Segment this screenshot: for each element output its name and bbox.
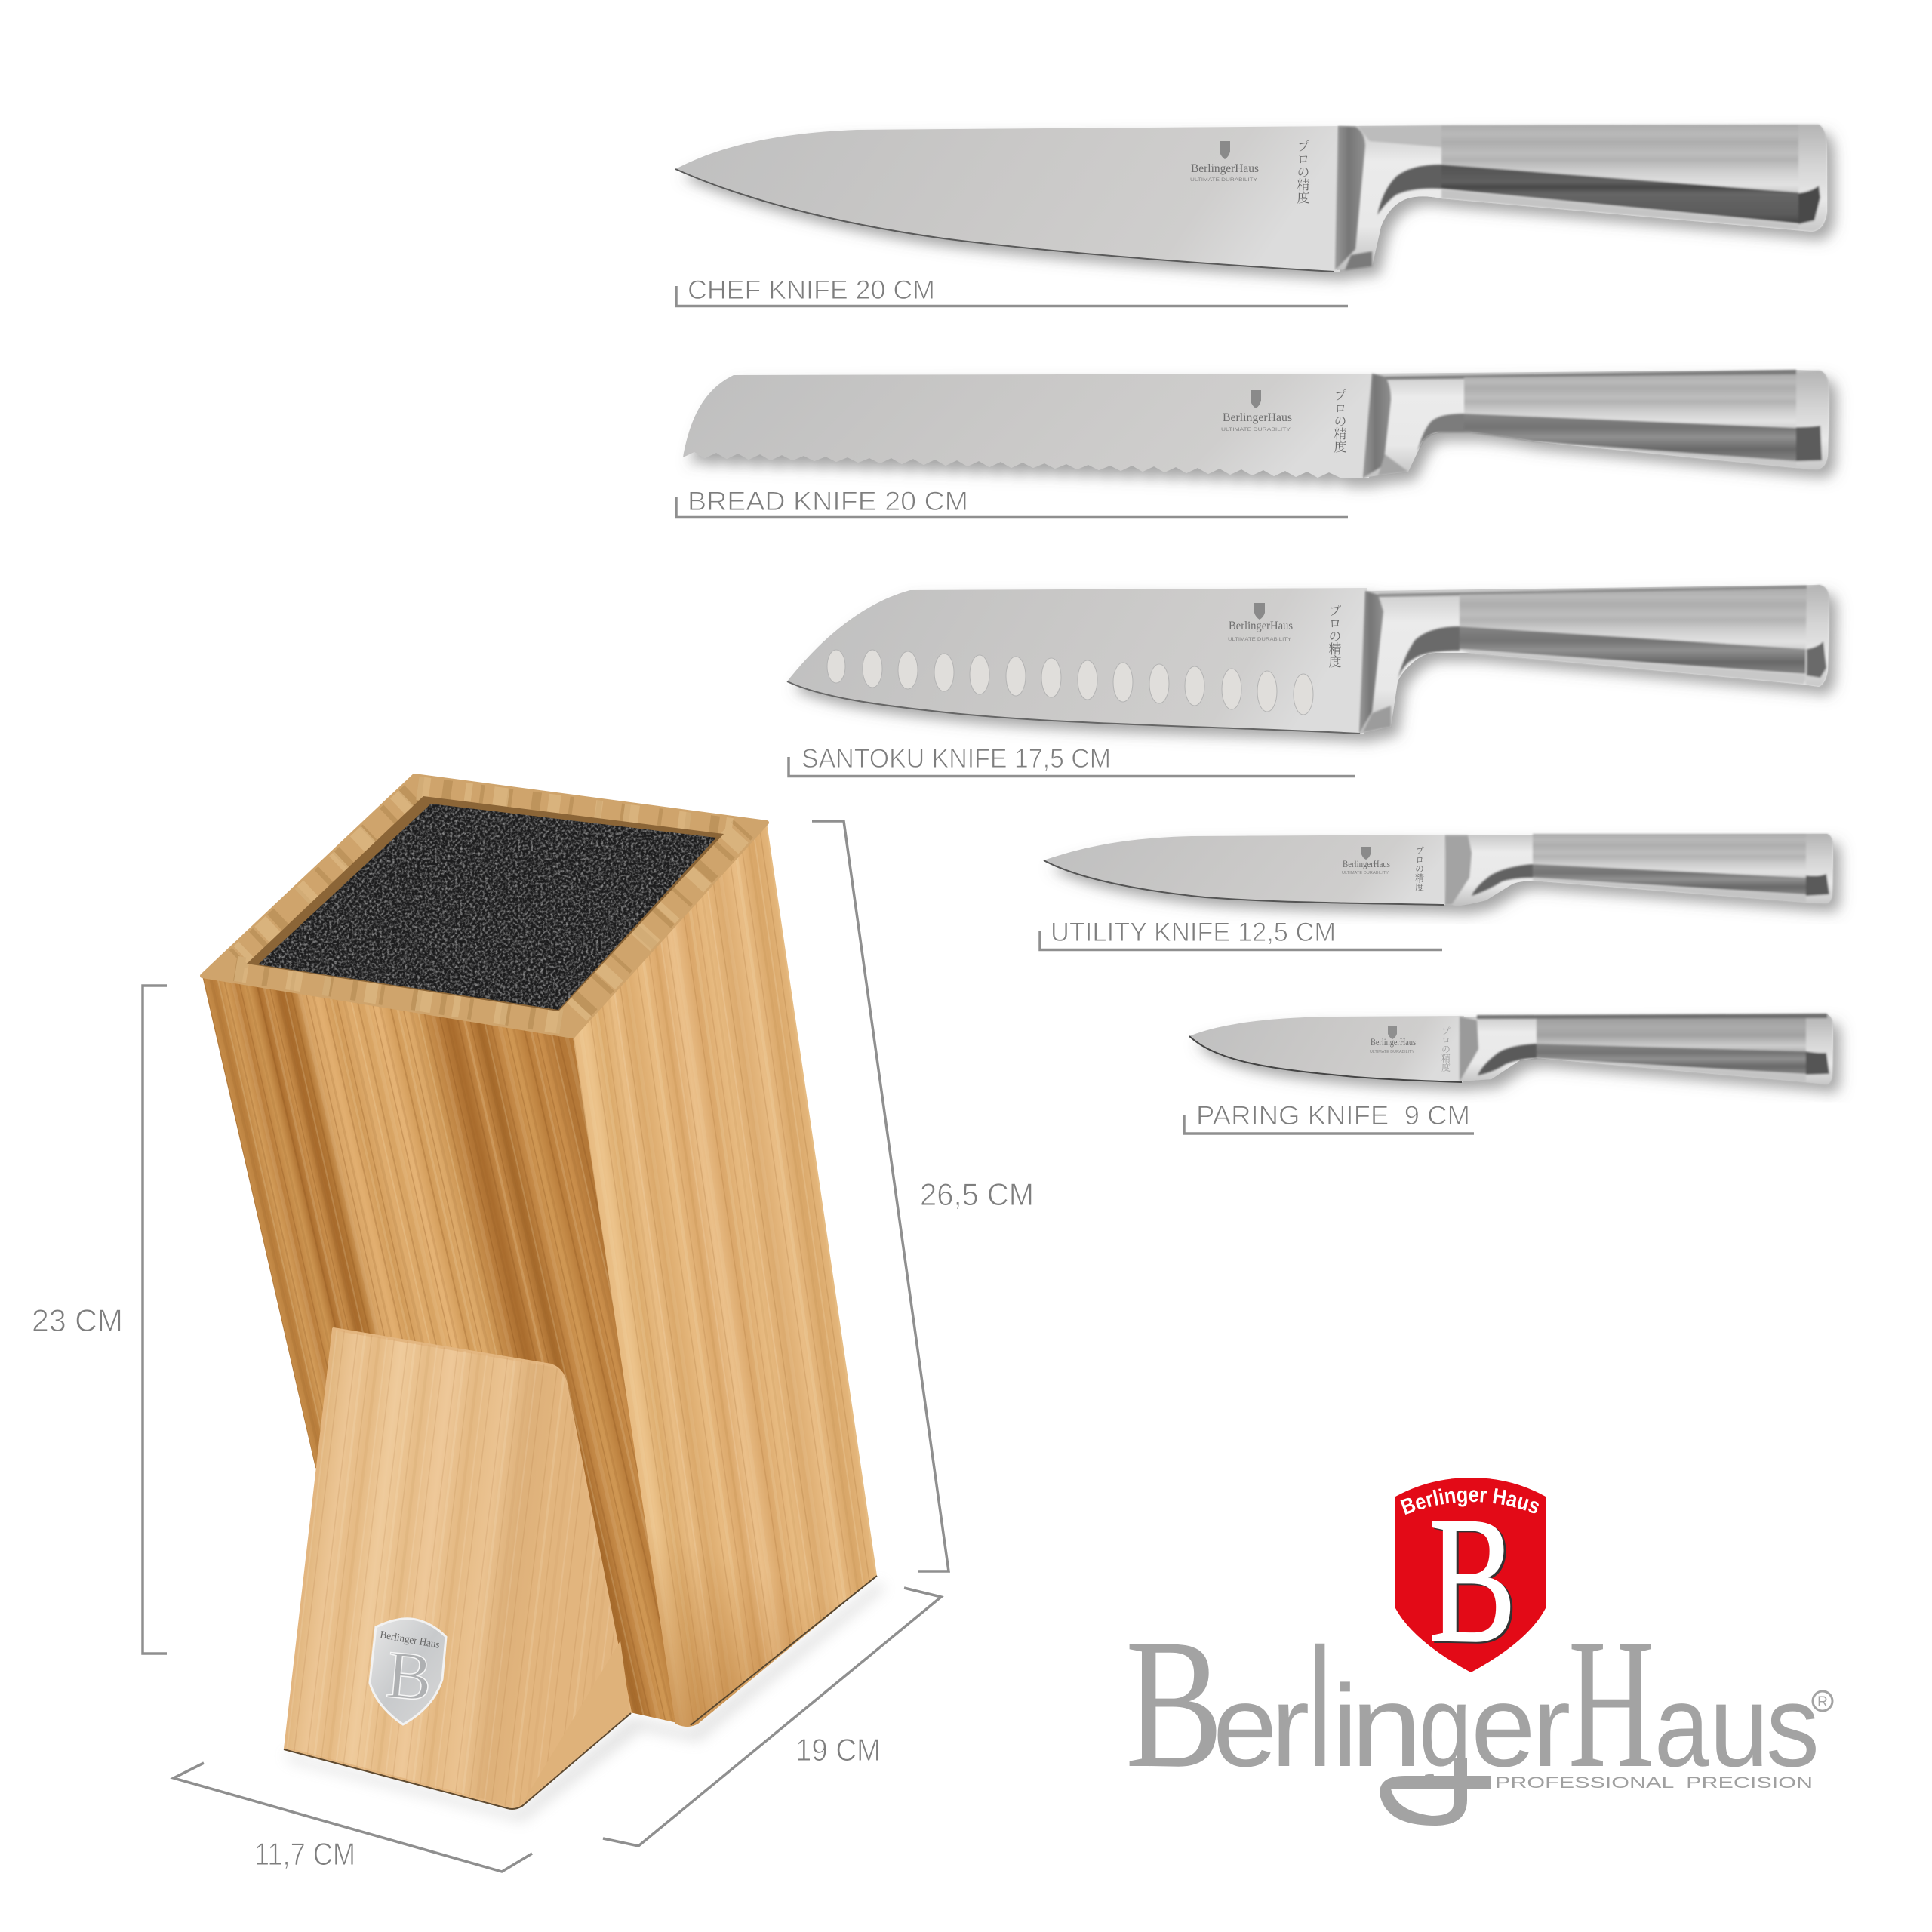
logo wordmark: r (1532, 1661, 1571, 1791)
panel: bamboo knife block (202, 776, 884, 1822)
santoku blade markings: ULTIMATE DURABILITY (1228, 637, 1292, 642)
paring blade markings (1370, 1026, 1452, 1072)
stand metal badge: Berlinger Haus (379, 1629, 441, 1651)
panel: paring knife (1184, 1014, 1833, 1134)
dimension: length 26,5 cm (812, 821, 1034, 1571)
utility blade markings (1342, 846, 1426, 891)
logo wordmark: i (1332, 1661, 1358, 1791)
bread blade markings: プロの精度 (1331, 389, 1349, 453)
dimension: height 23 cm (32, 986, 167, 1654)
logo red shield: B (1429, 1479, 1516, 1680)
chef blade markings: BerlingerHaus (1191, 162, 1259, 175)
bread blade markings (1221, 389, 1349, 453)
paring blade markings: BerlingerHaus (1371, 1036, 1416, 1048)
utility knife size bracket (1040, 931, 1442, 949)
block left face (202, 976, 688, 1725)
inner wall of the block opening (247, 796, 724, 1011)
logo wordmark: n (1351, 1661, 1422, 1791)
utility knife label: UTILITY KNIFE 12,5 CM (1051, 918, 1336, 947)
logo registered mark: R (1817, 1694, 1828, 1710)
logo registered mark (1813, 1691, 1832, 1711)
santoku knife size bracket (789, 757, 1355, 776)
santoku blade markings (1228, 603, 1345, 668)
paring knife size bracket (1184, 1115, 1474, 1134)
santoku knife label: SANTOKU KNIFE 17,5 CM (801, 744, 1111, 774)
dimension: depth 19 cm: 19 CM (795, 1732, 881, 1767)
bread blade markings: ULTIMATE DURABILITY (1221, 427, 1291, 432)
dimension: length 26,5 cm: 26,5 CM (920, 1177, 1034, 1212)
logo red shield: B (1431, 1481, 1518, 1681)
bread knife size bracket (676, 497, 1348, 518)
block right face (573, 823, 877, 1727)
chef blade markings: ULTIMATE DURABILITY (1190, 177, 1258, 183)
paring knife photo (1189, 1014, 1833, 1084)
santoku knife photo (787, 585, 1829, 734)
utility blade markings: プロの精度 (1413, 846, 1426, 891)
utility knife photo (1044, 834, 1833, 906)
logo wordmark: H (1568, 1601, 1654, 1807)
chef blade markings (1190, 140, 1313, 204)
santoku blade markings: BerlingerHaus (1229, 620, 1293, 632)
logo wordmark (1129, 1644, 1816, 1826)
panel: santoku knife (787, 585, 1829, 776)
dimension: width 11,7 cm (174, 1763, 532, 1872)
chef blade markings: プロの精度 (1294, 140, 1313, 204)
stand metal badge: B (383, 1637, 435, 1715)
logo tagline: PROFESSIONAL PRECISION (1495, 1774, 1813, 1792)
santoku blade hollows (827, 650, 1313, 715)
stand metal badge (370, 1619, 446, 1724)
dimension: height 23 cm: 23 CM (32, 1303, 123, 1338)
chef knife label: CHEF KNIFE 20 CM (688, 275, 935, 305)
panel: bread knife (676, 370, 1829, 518)
block ground shadow (284, 1581, 884, 1822)
logo wordmark: r (1271, 1661, 1309, 1791)
logo wordmark: B (1125, 1601, 1223, 1807)
paring blade markings: プロの精度 (1440, 1026, 1452, 1072)
dimension: depth 19 cm (603, 1588, 941, 1846)
logo wordmark: e (1471, 1661, 1536, 1791)
logo red shield: Berlinger Haus (1401, 1488, 1539, 1515)
paring blade markings: ULTIMATE DURABILITY (1370, 1050, 1415, 1054)
logo wordmark: e (1213, 1661, 1278, 1791)
panel: utility knife (1040, 834, 1833, 949)
stand wedge (284, 1329, 631, 1809)
black felt insert (258, 804, 716, 1010)
santoku blade markings: プロの精度 (1325, 604, 1345, 668)
panel: chef knife (675, 125, 1827, 306)
logo wordmark: u (1709, 1661, 1769, 1791)
logo wordmark: l (1308, 1614, 1332, 1802)
bread knife photo (683, 370, 1829, 478)
logo wordmark: s (1766, 1661, 1820, 1791)
utility blade markings: BerlingerHaus (1343, 858, 1390, 869)
logo: Berlinger Haus (1125, 1478, 1834, 1826)
logo wordmark: g (1419, 1661, 1472, 1791)
bread knife label: BREAD KNIFE 20 CM (688, 487, 968, 516)
bread blade markings: BerlingerHaus (1223, 411, 1292, 424)
paring knife label: PARING KNIFE 9 CM (1196, 1101, 1470, 1131)
dimension: width 11,7 cm: 11,7 CM (254, 1836, 355, 1872)
logo wordmark: a (1654, 1661, 1709, 1791)
utility blade markings: ULTIMATE DURABILITY (1342, 871, 1389, 875)
block top rim (202, 776, 767, 1036)
chef knife size bracket (676, 286, 1348, 306)
chef knife photo (675, 125, 1827, 272)
